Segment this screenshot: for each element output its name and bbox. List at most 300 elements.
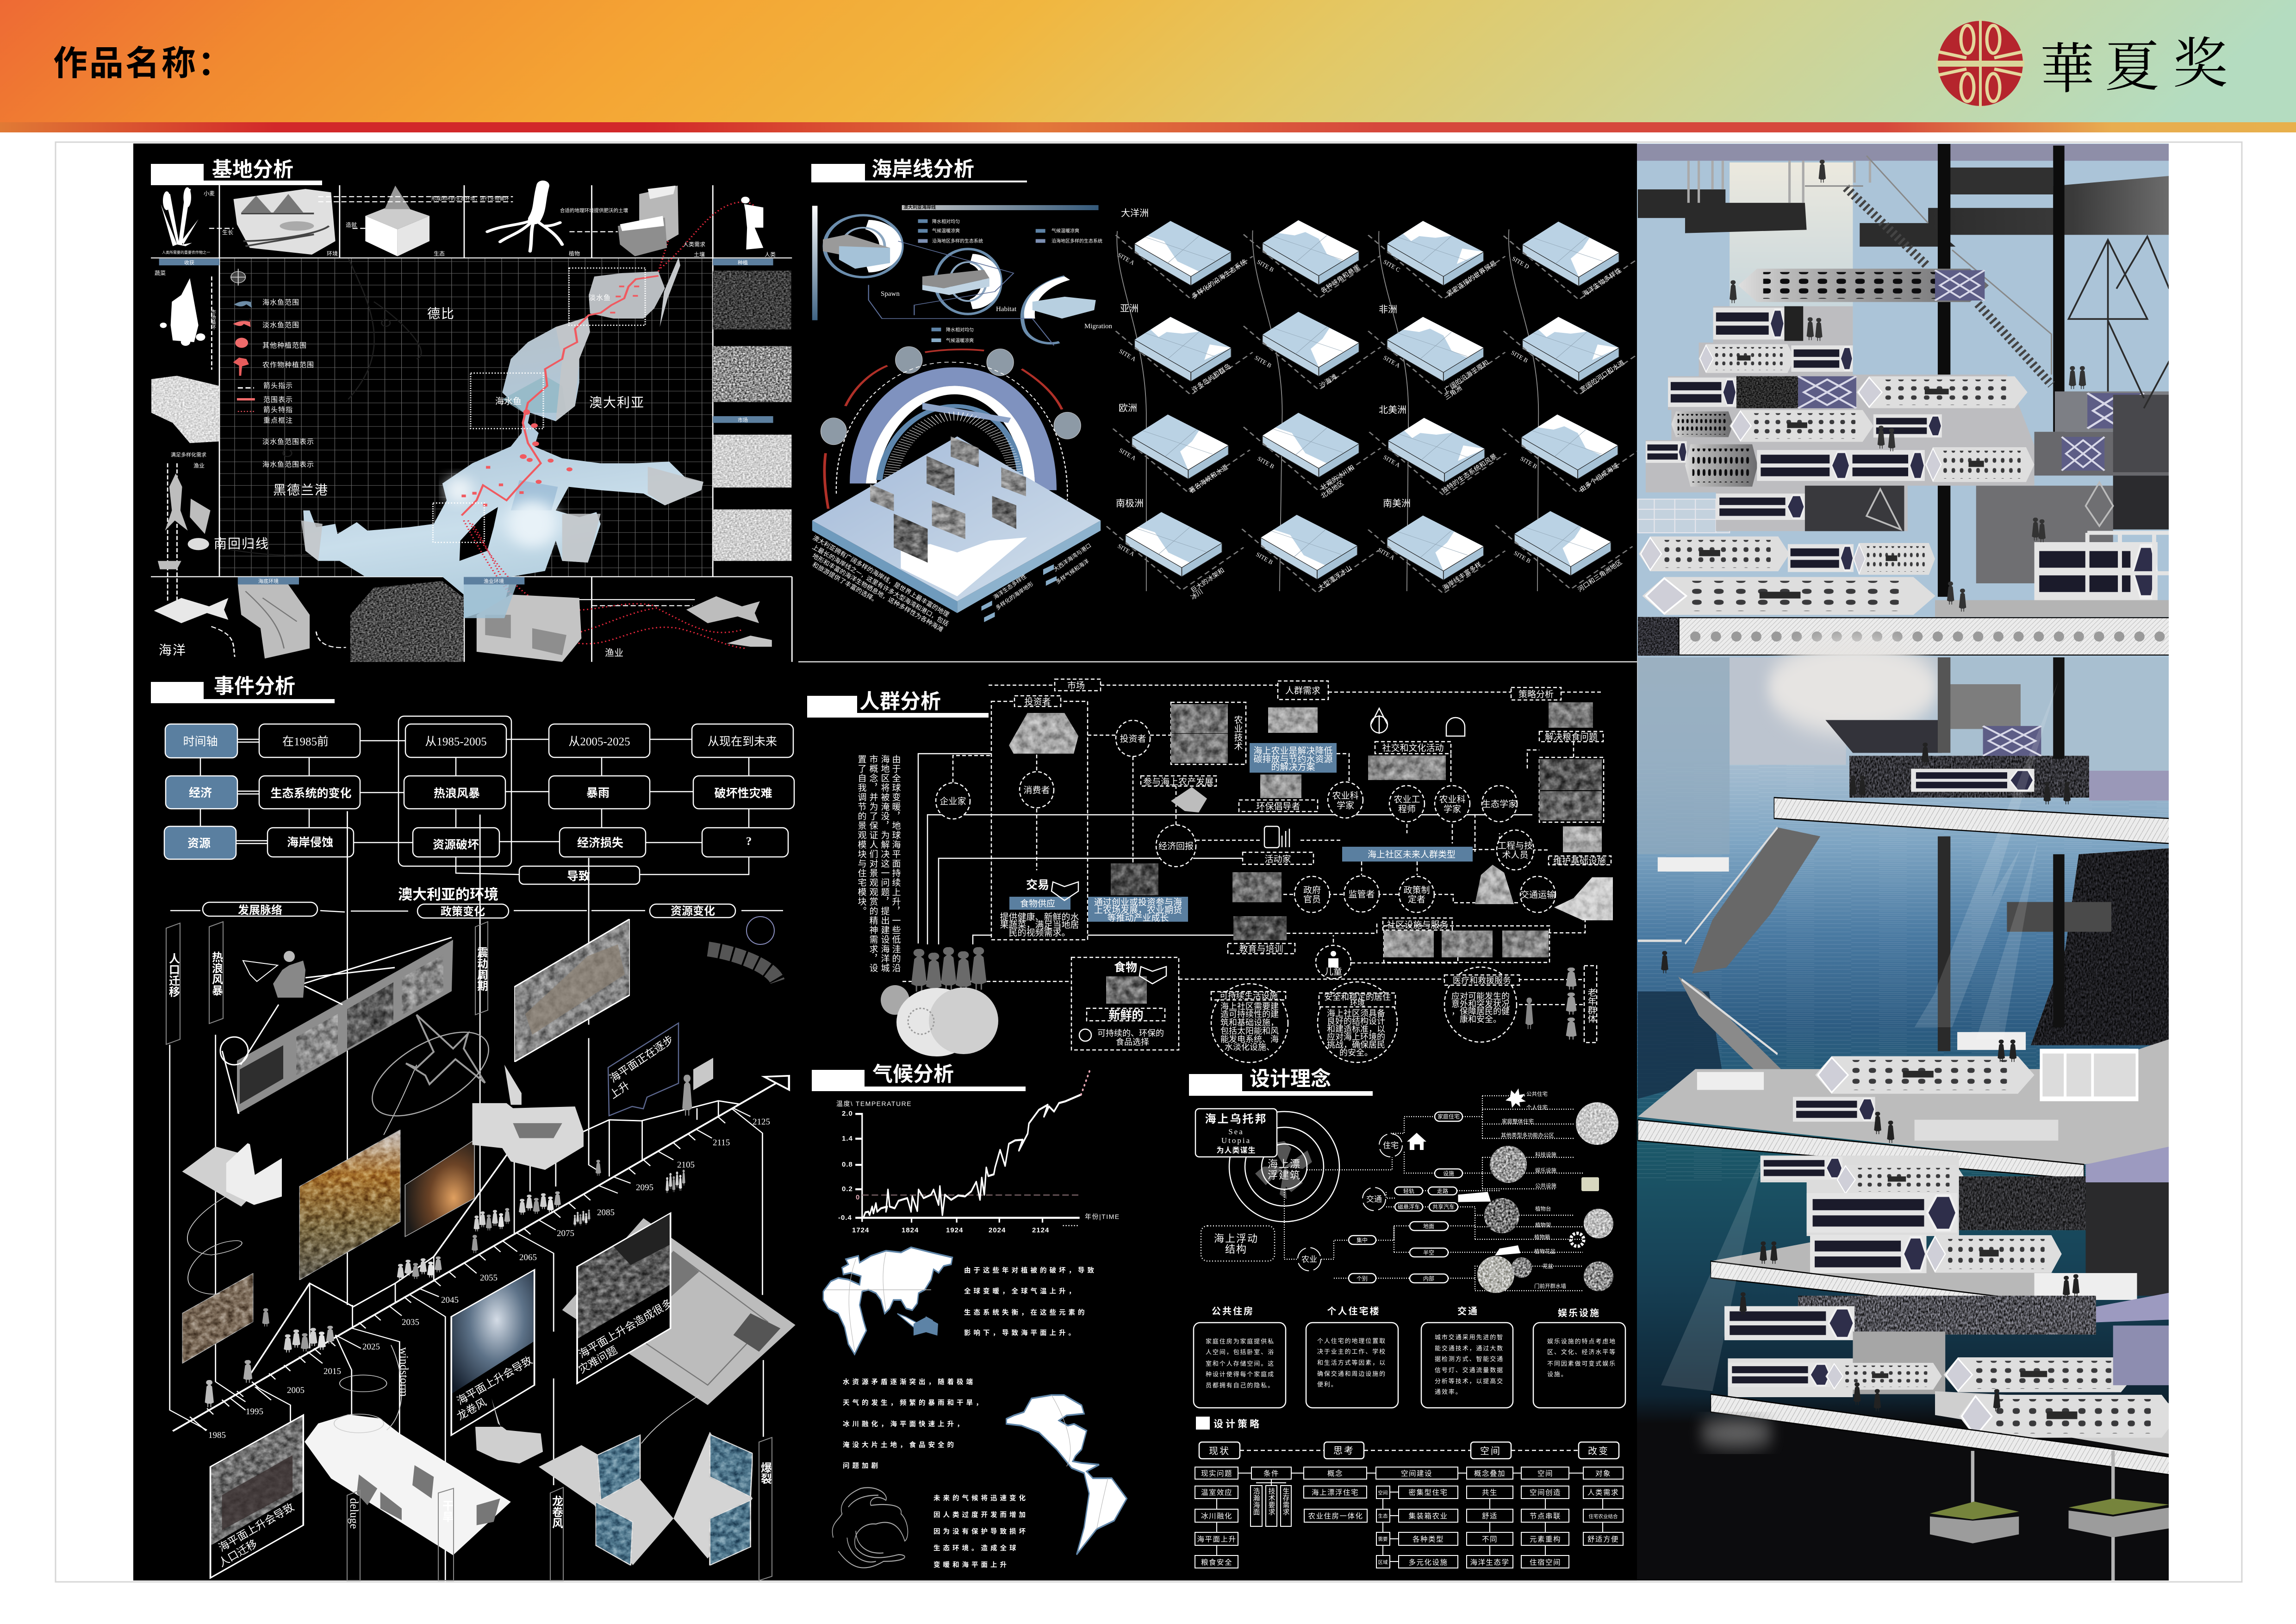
coastline text labels: 气候温暖凉爽 <box>932 228 960 234</box>
isometric timeline drawing <box>170 811 796 1582</box>
axis ticks <box>190 1108 751 1431</box>
slab 4 <box>1711 1394 2169 1475</box>
dashed role circles: 农业科 <box>1332 791 1359 801</box>
roof hangers <box>1688 161 1870 203</box>
vertical intro paragraph: 海地区将被淹没，为解决这一问题，提出建设海洋城 <box>879 755 890 973</box>
site map text labels: 小麦 <box>204 190 215 197</box>
strategy flow: 浩瀚海面 <box>1252 1487 1260 1515</box>
panel: crowd analysis: 交易 <box>1026 879 1049 892</box>
safe housing circle: 的安全。 <box>1339 1048 1373 1057</box>
smoke under slab <box>1699 1420 1774 1446</box>
timeline text labels: 2045 <box>441 1295 459 1305</box>
temperature line chart: -0.4 <box>838 1214 852 1222</box>
mind map leaf labels: 家庭整体住宅 <box>1502 1118 1534 1124</box>
mind map pills: 家庭住宅 <box>1437 1113 1460 1120</box>
climate paragraph 1: 影响下，导致海平面上升。 <box>964 1329 1078 1337</box>
box: floating structure <box>1201 1226 1275 1261</box>
four program cards: 便利。 <box>1317 1381 1338 1388</box>
dashed category labels: 社交和文化活动 <box>1382 743 1444 753</box>
resources row: 海岸侵蚀 <box>287 836 333 849</box>
upper dark platforms <box>1638 168 2169 247</box>
row 1 terrain blocks <box>1116 220 1641 300</box>
mind map leaf labels: 科技设施 <box>1535 1151 1556 1158</box>
sub-heading: Australian environment: 澳大利亚的环境 <box>398 887 498 903</box>
modules between slabs <box>1711 1147 2169 1308</box>
sustainable facilities circle: 造可持续性的建 <box>1220 1010 1279 1019</box>
coastline text labels: 气候温暖凉爽 <box>946 337 974 344</box>
blue info boxes: 海上农业是解决降低 <box>1253 746 1333 756</box>
site map text labels: 市场循环 <box>210 309 216 330</box>
vertical intro paragraph: 置了自我调节的景观模块与住宅模块。 <box>856 755 866 916</box>
coastline text labels: Habitat <box>996 306 1017 313</box>
site map text labels: 箭头特指 <box>263 406 293 414</box>
site map text labels: 海底环境 <box>258 578 279 584</box>
row 3 terrain blocks <box>1113 413 1639 496</box>
strategy flow: 思考 <box>1333 1445 1355 1456</box>
heading: design concept: 设计理念 <box>1250 1068 1331 1090</box>
semicircle data arcs <box>836 362 1067 500</box>
timeline row: 时间轴 <box>183 735 218 748</box>
perforated slab <box>1679 618 2172 655</box>
site map text labels: 淡水鱼 <box>589 294 611 302</box>
slab 3 <box>1711 1261 2091 1319</box>
strategy flow: 空间 <box>1480 1446 1501 1456</box>
dashed category labels: 农业技术 <box>1233 715 1243 750</box>
temperature line chart: 0.2 <box>842 1185 853 1193</box>
timeline text labels: 2095 <box>636 1183 653 1193</box>
strategy flow: 区域 <box>1378 1559 1388 1565</box>
vertical intro paragraph: 市概念，并为了保证人们对景观观赏的精神需求，设 <box>868 755 878 973</box>
timeline text labels: 上升 <box>607 1079 632 1101</box>
modules above slab 4 <box>1724 1296 2178 1454</box>
temperature line chart: 1924 <box>946 1226 963 1234</box>
site map text labels: 形成闭环的生态环境，进行生物循环 <box>431 195 509 201</box>
sky background <box>1637 144 2169 657</box>
coastline text labels: SITE A <box>1116 251 1136 267</box>
legend markers <box>230 269 255 412</box>
coastline text labels: SITE B <box>1519 455 1538 470</box>
heading: event analysis <box>151 675 335 703</box>
timeline row <box>165 724 793 758</box>
coastline text labels: SITE C <box>1382 258 1401 273</box>
person and signboard <box>693 1058 713 1090</box>
speech bubble: sea level <box>608 1023 678 1116</box>
distant bridge haze <box>1638 499 1730 533</box>
panel: climate analysis <box>812 1063 1127 1569</box>
date axis <box>173 1076 789 1431</box>
award name <box>2040 19 2228 104</box>
coastline text labels: 河口和三角洲地区 <box>1576 558 1624 593</box>
coastline text labels: SITE A <box>1116 543 1136 558</box>
four program cards: 分析等技术，以提高交 <box>1435 1378 1504 1385</box>
dashed role circles: 农业科 <box>1439 794 1466 805</box>
food block: 新鲜的 <box>1108 1009 1144 1022</box>
coastline text labels: 三角洲 <box>1443 384 1463 401</box>
medical services circle: ，保障居民的健 <box>1451 1007 1510 1016</box>
coastline text labels: 由多个组成海域 <box>1578 462 1620 493</box>
frame: migration crowd photo <box>211 1415 303 1578</box>
timeline flow chart <box>164 716 794 884</box>
economy row: 经济 <box>189 787 212 800</box>
title box: sea utopia: 海上乌托邦 <box>1205 1113 1267 1125</box>
strategy flow: 舒适方便 <box>1587 1535 1619 1543</box>
site map text labels: 渔业环境 <box>484 578 504 584</box>
concentric concept diagram: 浮建筑 <box>1268 1169 1301 1181</box>
economy row: 破坏性灾难 <box>714 787 772 800</box>
blue info boxes: 食物供应 <box>1020 899 1055 909</box>
mind map nodes: 住宅 <box>1383 1141 1399 1150</box>
coastline text labels: 各种峡角和悬崖 <box>1319 263 1361 294</box>
food supply text: 民的视频需求。 <box>1008 928 1070 938</box>
food supply text: 提供健康、新鲜的水 <box>1000 912 1079 922</box>
coastline text labels: 冰川 <box>1189 588 1204 601</box>
dashed role circles: 工程与技 <box>1498 841 1533 851</box>
dashed role circles: 学家 <box>1337 800 1354 811</box>
sustainable facilities circle: 筑和基础设施， <box>1220 1018 1279 1027</box>
bottom strip illustrations <box>154 577 772 662</box>
dashed category labels: 策略分析 <box>1518 689 1554 700</box>
photo: wildfire <box>405 1140 474 1237</box>
concentric concept diagram <box>1195 1109 1339 1261</box>
dashed role circles: 程师 <box>1398 804 1416 814</box>
dashed role circles: 消费者 <box>1023 785 1050 795</box>
four program cards: 交通 <box>1457 1305 1479 1317</box>
site map text labels: 黑德兰港 <box>273 483 329 497</box>
timeline text labels: 1985 <box>208 1430 226 1440</box>
illustration: sack of vegetables <box>160 278 205 346</box>
dashed category labels: 社区设施与服务 <box>1387 920 1449 930</box>
coastline text labels: 北美洲 <box>1379 405 1406 415</box>
heading: design strategy: 设计策略 <box>1213 1419 1262 1430</box>
strategy flow: 海上漂浮住宅 <box>1312 1488 1359 1497</box>
strategy flow: 概念叠加 <box>1474 1469 1506 1478</box>
fish life cycle rings <box>825 215 1070 345</box>
coastline text labels: 多样化的沿海生态系统 <box>1190 258 1248 300</box>
strategy flow: 改变 <box>1588 1446 1609 1456</box>
illustration: rocks <box>618 186 678 256</box>
dashed category labels: 活动家 <box>1264 854 1291 864</box>
strategy flow: 空间创造 <box>1530 1488 1561 1497</box>
strategy flow: 空间 <box>1537 1469 1553 1478</box>
illustration: tree roots <box>487 186 562 251</box>
water streaks <box>1637 764 2169 1181</box>
elderly column <box>1525 966 1597 1043</box>
site map text labels: 渔业 <box>193 462 205 469</box>
timeline text labels: 震动周期 <box>475 947 488 991</box>
coastline text labels: SITE B <box>1253 354 1273 369</box>
mind map pills: 设施 <box>1443 1170 1454 1177</box>
site photos on platform <box>870 437 1026 562</box>
four program cards: 区、文化、经济水平等 <box>1547 1349 1616 1355</box>
box: floating structure: 结构 <box>1225 1243 1247 1255</box>
coastline text labels: 和旅游提供了丰富的选择。 <box>811 561 880 605</box>
timeline text labels: 2015 <box>324 1367 341 1376</box>
title box: sea utopia: Sea <box>1228 1127 1244 1136</box>
lower seascape <box>1637 657 2169 1580</box>
timeline text labels: 龙卷风 <box>454 1396 488 1422</box>
strategy flow: 概念 <box>1327 1469 1343 1478</box>
climate paragraph 1 <box>964 1266 1097 1337</box>
site map text labels: 海水鱼范围 <box>262 298 299 306</box>
strategy flow: 农业住房一体化 <box>1308 1512 1363 1520</box>
coastline text labels: 沙海滩 <box>1318 373 1338 389</box>
coastline text labels: 大洋洲 <box>1121 208 1149 219</box>
heading: site analysis: 基地分析 <box>212 158 293 181</box>
upper floor modules <box>1825 657 2089 798</box>
site map text labels: 淡水鱼范围 <box>262 321 299 329</box>
four program cards: 据检测方式、智能交通 <box>1435 1355 1504 1362</box>
strategy flow: 需要 <box>1378 1537 1388 1542</box>
photo: mountain coast <box>299 1130 400 1280</box>
coastline text labels: Spawn <box>881 290 900 298</box>
site map text labels: 人类 <box>765 251 776 258</box>
four program cards: 个人住宅的地理位置取 <box>1317 1337 1386 1344</box>
coastline text labels: SITE A <box>1382 454 1402 469</box>
boat plan <box>305 1414 511 1555</box>
module stack rows <box>1639 269 2113 615</box>
house module top left <box>182 1143 282 1206</box>
globes and crowd <box>881 947 998 1056</box>
strategy flow <box>1195 1442 1623 1568</box>
mind map leaf labels <box>1501 1091 1566 1289</box>
pills: development, policy, resources: 资源变化 <box>671 905 715 918</box>
site map text labels: 土壤 <box>694 251 705 258</box>
dashed role circles: 农业工 <box>1394 794 1420 805</box>
sustainable facilities circle: 能发电系统、海 <box>1220 1035 1279 1044</box>
coastline text labels: 亚洲 <box>1120 304 1139 314</box>
economy row <box>166 776 794 809</box>
strategy flow: 节点串联 <box>1530 1512 1561 1520</box>
red dotted migration routes <box>464 202 755 649</box>
four program cards: 室和个人存储空间。这 <box>1206 1360 1275 1367</box>
coastline text labels: 北极地区 <box>1319 479 1345 500</box>
icon: great wave <box>832 1487 908 1568</box>
title box: sea utopia <box>1195 1109 1277 1157</box>
coastline text labels: 沿海地区多样的生态系统 <box>1052 238 1102 244</box>
coastline text labels: 澳大利亚海岸线 <box>903 204 936 210</box>
site map text labels: 德比 <box>427 306 455 321</box>
mind map connectors <box>1284 1096 1583 1291</box>
row 2 terrain blocks <box>1116 312 1641 395</box>
blue info boxes: 上农场发展，农业期货 <box>1094 905 1182 915</box>
timeline text labels: 灾难问题 <box>577 1344 619 1375</box>
site map text labels: 澳大利亚 <box>589 395 645 410</box>
timeline text labels: 热浪风暴 <box>210 951 223 996</box>
black columns <box>1938 144 2065 597</box>
red cycle arrows <box>824 350 1062 578</box>
site map text labels: 淡水鱼范围表示 <box>262 437 314 446</box>
food supply text: 果蔬菜，满足当地居 <box>1000 920 1079 930</box>
food block: 食物 <box>1114 961 1137 974</box>
climate paragraph 2: 水资源矛盾逐渐突出，随着极端 <box>843 1378 976 1386</box>
coastline text labels: 气候温暖凉爽 <box>1052 228 1079 234</box>
site map text labels: 重点框注 <box>263 417 293 425</box>
mind map nodes: 农业 <box>1301 1255 1317 1264</box>
four program cards: 决于业主的工作、学校 <box>1317 1348 1386 1355</box>
dashed arrows <box>168 197 693 657</box>
heading: site analysis <box>151 158 322 185</box>
site map text labels: 箭头指示 <box>263 381 293 390</box>
dashed category labels: 教育与培训 <box>1239 944 1283 954</box>
stakeholder connectors <box>902 685 1601 1005</box>
safe housing circle: 挑战，确保居民 <box>1327 1040 1385 1049</box>
header band <box>0 0 2296 132</box>
mind map leaf labels: 公共住宅 <box>1526 1091 1548 1097</box>
site map text labels: 造就 <box>346 222 357 228</box>
strategy flow: 住宿空间 <box>1530 1558 1561 1567</box>
safe housing circle: 和建造标准，以 <box>1327 1024 1385 1034</box>
slab 1 <box>1774 798 2169 843</box>
coastline text labels: 沿海地区多样的生态系统 <box>932 238 983 244</box>
mind map pills: 集中 <box>1356 1237 1368 1243</box>
coastline text labels: SITE A <box>1376 546 1396 562</box>
four program cards: 娱乐设施的特点考虑地 <box>1547 1338 1616 1345</box>
economy row: 热浪风暴 <box>434 787 480 800</box>
timeline text labels: 2025 <box>362 1342 380 1352</box>
four program cards: 公共住房 <box>1212 1306 1254 1317</box>
title box: sea utopia: Utopia <box>1221 1136 1251 1145</box>
crowd silhouettes <box>205 1074 692 1407</box>
heading: coastline analysis <box>811 158 1027 182</box>
dashed category labels <box>991 679 1611 962</box>
header red strip <box>0 122 2296 132</box>
site map text labels: 收获 <box>184 259 194 266</box>
site map text labels: 生长 <box>222 229 233 236</box>
dashed category labels: 参与海上农产发展 <box>1143 777 1213 787</box>
black board <box>133 144 1637 1580</box>
timeline text labels: 2035 <box>402 1318 419 1327</box>
temperature line chart: 2024 <box>989 1226 1006 1234</box>
climate paragraph 1: 生态系统失衡，在这些元素的 <box>964 1308 1088 1317</box>
climate paragraph 2 <box>843 1378 985 1470</box>
climate paragraph 3 <box>933 1494 1028 1569</box>
mind map leaf labels: 个人住宅 <box>1526 1104 1548 1111</box>
dashed role circles: 投资者 <box>1120 734 1146 744</box>
medical services circle: 应对可能发生的 <box>1451 992 1510 1001</box>
climate paragraph 3: 因为没有保护导致损坏 <box>933 1528 1028 1536</box>
safe housing circle: 良好的结构设计 <box>1327 1017 1385 1026</box>
title box: sea utopia: 为人类谋生 <box>1216 1146 1256 1155</box>
mind map pills: 共享汽车 <box>1432 1203 1455 1210</box>
temperature line chart: 温度\ TEMPERATURE <box>836 1100 912 1107</box>
pills: development, policy, resources: 政策变化 <box>441 905 485 918</box>
four program cards: 和生活方式等因素，以 <box>1317 1359 1386 1366</box>
timeline text labels: 2125 <box>753 1117 770 1127</box>
climate paragraph 3: 未来的气候将迅速变化 <box>933 1494 1028 1502</box>
coastline text labels: 非洲 <box>1379 304 1397 315</box>
illustration: wheat <box>161 187 199 246</box>
strategy flow: 现实问题 <box>1201 1469 1232 1478</box>
coastline text labels: SITE B <box>1256 258 1275 273</box>
dashed category labels: 环保倡导者 <box>1256 801 1300 812</box>
site map text labels: 海水鱼 <box>495 396 522 406</box>
coastline text labels: 巨大的冰架和 <box>1189 566 1226 594</box>
strategy flow: 集装箱农业 <box>1408 1512 1448 1520</box>
four program cards: 家庭住房为家庭提供私 <box>1206 1338 1275 1345</box>
site map text labels: 植物 <box>569 250 580 257</box>
coastline text labels: SITE B <box>1510 349 1529 364</box>
resources row: 资源 <box>187 837 211 850</box>
platform legend swatches <box>981 564 1057 622</box>
strategy flow: 不同 <box>1482 1536 1498 1543</box>
blue section tabs <box>159 259 773 585</box>
mind map leaf labels: 娱乐设施 <box>1535 1167 1556 1174</box>
site map text labels: 合适的地理环境提供肥沃的土壤 <box>560 207 628 213</box>
four program cards: 信号灯、交通流量数据 <box>1435 1367 1504 1374</box>
strategy flow: 元素重构 <box>1530 1535 1561 1543</box>
mind map pills: 内部 <box>1423 1275 1434 1282</box>
coastline drawings <box>812 205 1641 622</box>
site map text labels: 蔬菜 <box>155 270 166 276</box>
coastline text labels: 著名海峡和水道 <box>1188 463 1229 494</box>
icon: house <box>1407 1133 1426 1150</box>
timeline text labels: 2065 <box>519 1253 537 1262</box>
vertical intro paragraph <box>856 755 901 973</box>
coastline text labels: 南美洲 <box>1383 498 1411 509</box>
dashed role circles: 企业家 <box>940 796 966 806</box>
heading: climate analysis <box>812 1063 1026 1091</box>
site map text labels: 其他种植范围 <box>262 342 307 350</box>
blue info boxes: 的解决方案 <box>1271 762 1315 772</box>
food block: 食品选择 <box>1116 1037 1149 1047</box>
market and planting photos <box>713 271 791 561</box>
isometric coastline platform <box>812 437 1101 613</box>
sustainable facilities circle: 海上社区需要建 <box>1220 1002 1279 1011</box>
four program cards <box>1194 1305 1625 1408</box>
food supply text <box>1000 912 1079 938</box>
site map text labels: 人类需求 <box>683 241 705 248</box>
climate paragraph 2: 冰川融化，海平面快速上升， <box>843 1420 966 1428</box>
strategy flow: 空间 <box>1378 1490 1388 1496</box>
right gray volumes <box>1976 391 2169 583</box>
strategy flow: 海平面上升 <box>1197 1535 1237 1543</box>
mind map leaf labels: 植物架 <box>1535 1222 1551 1228</box>
strategy flow: 粮食安全 <box>1201 1558 1232 1567</box>
dashed role circles: 交通运输 <box>1520 890 1556 900</box>
divider under coastline panel <box>798 661 1637 662</box>
medical services circle <box>1444 967 1519 1042</box>
lower people <box>1661 743 2079 1412</box>
four program cards: 娱乐设施 <box>1558 1308 1600 1318</box>
site map text labels: 海洋 <box>159 643 187 657</box>
sea lattice <box>1638 992 1723 1099</box>
strategy flow: 温室效应 <box>1201 1488 1232 1497</box>
site map text labels <box>155 190 776 658</box>
site map text labels: 农作物种植范围 <box>262 361 314 369</box>
timeline row: 从2005-2025 <box>568 736 630 748</box>
dashed role circles: 术人员 <box>1502 850 1529 860</box>
food block: 可持续的、环保的 <box>1097 1029 1164 1038</box>
middle platform <box>1938 837 2111 1051</box>
dotted site frames <box>433 268 645 543</box>
strategy flow: 现状 <box>1209 1446 1230 1456</box>
frame: flooding photo <box>562 1213 796 1405</box>
coastline text labels: 南极洲 <box>1116 498 1144 509</box>
strategy flow: 海洋生态学 <box>1470 1558 1510 1567</box>
climate paragraph 2: 问题加剧 <box>843 1462 881 1470</box>
coastline text labels: 海洋生物多样性 <box>1581 266 1623 298</box>
timeline row: 从1985-2005 <box>425 736 487 748</box>
coastline text labels: 大西洋海湾与港口 <box>1052 542 1092 573</box>
blue info boxes <box>1009 743 1473 923</box>
coastline text labels: SITE B <box>1256 455 1276 470</box>
coastline text labels: 欧洲 <box>1119 403 1137 413</box>
red markers <box>461 286 639 506</box>
food block <box>1071 957 1179 1050</box>
map: Eurasia and Africa <box>823 1247 952 1354</box>
ground strip <box>1638 617 1679 656</box>
timeline text labels: 2105 <box>677 1160 695 1170</box>
